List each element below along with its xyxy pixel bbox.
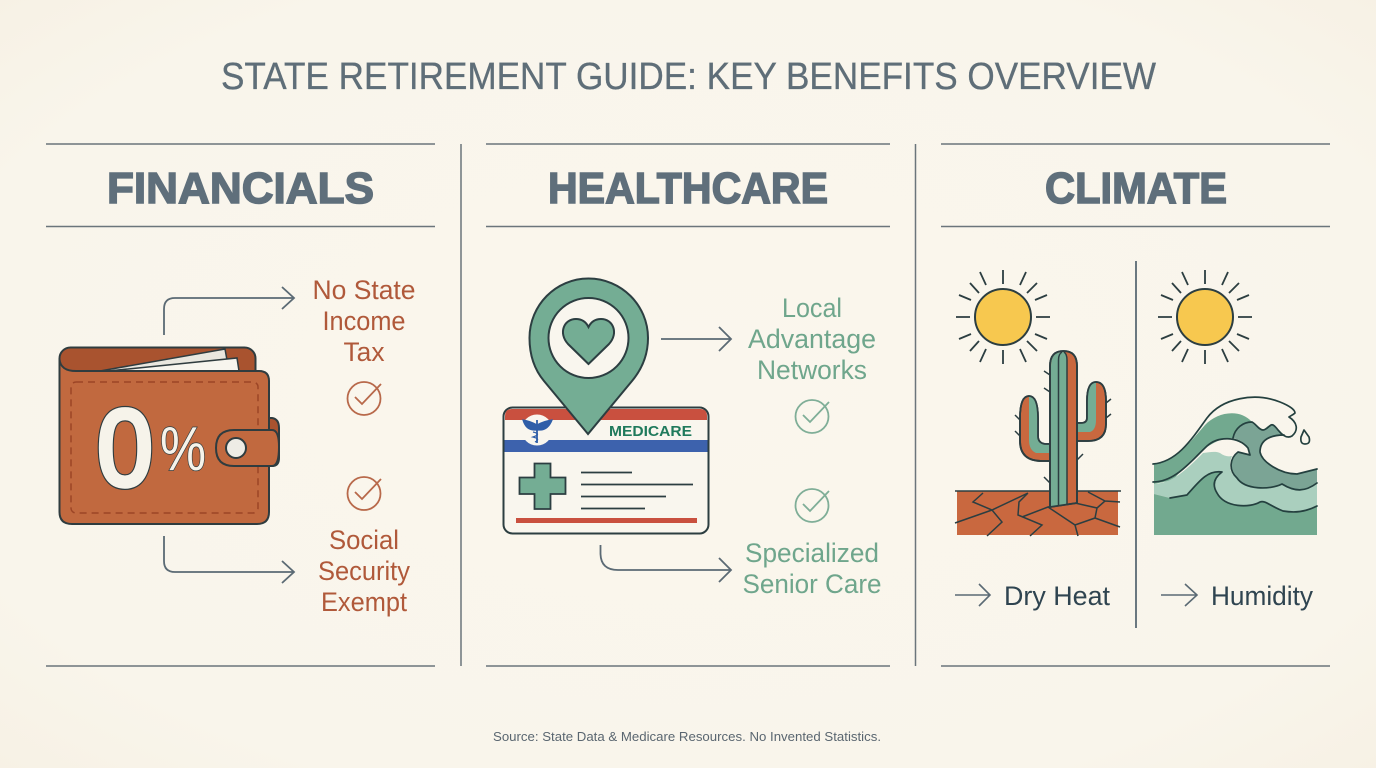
text: specialized senior care: Senior Care bbox=[742, 569, 882, 599]
label: 0%: 0 bbox=[98, 387, 152, 508]
source note: Source: State Data & Medicare Resources. No Invented Statistics. bbox=[493, 729, 881, 744]
text: dry heat: Dry Heat bbox=[1004, 581, 1110, 611]
icon: caduceus bbox=[523, 420, 552, 443]
text: humidity: Humidity bbox=[1211, 581, 1313, 611]
label: percent sign: % bbox=[160, 415, 206, 484]
panel: healthcare bbox=[504, 164, 882, 599]
icon: sun over sea bbox=[1158, 270, 1252, 364]
arrow: to dry heat bbox=[955, 584, 990, 606]
arrow: to no state income tax bbox=[164, 287, 294, 335]
icon: wave bbox=[1153, 397, 1317, 535]
icon: cracked desert ground bbox=[955, 491, 1121, 536]
icon: location pin with heart bbox=[530, 278, 648, 434]
icon: check bbox=[348, 382, 381, 415]
heading: financials: FINANCIALS bbox=[107, 164, 374, 213]
text: local advantage networks: Advantage bbox=[748, 324, 876, 354]
icon: wallet with 0% bbox=[60, 348, 279, 524]
icon: medicare card bbox=[504, 408, 708, 534]
icon: check bbox=[796, 489, 829, 522]
icon: cactus bbox=[1015, 351, 1111, 507]
title: STATE RETIREMENT GUIDE: KEY BENEFITS OVERVIEW bbox=[221, 56, 1156, 98]
arrow: to humidity bbox=[1161, 584, 1197, 606]
text: social security exempt: Exempt bbox=[321, 587, 407, 617]
icon: check bbox=[796, 400, 829, 433]
label: medicare: MEDICARE bbox=[609, 424, 692, 440]
icon: sun over desert bbox=[956, 270, 1050, 364]
arrow: to specialized senior care bbox=[600, 545, 731, 582]
panel: financials bbox=[60, 164, 416, 617]
text: local advantage networks bbox=[748, 293, 876, 385]
text: local advantage networks: Local bbox=[782, 293, 842, 323]
text: social security exempt: Security bbox=[318, 556, 410, 586]
heading: healthcare: HEALTHCARE bbox=[548, 164, 828, 213]
text: no state income tax: Income bbox=[322, 306, 406, 336]
text: social security exempt: Social bbox=[329, 525, 399, 555]
text: no state income tax: No State bbox=[312, 275, 416, 305]
text: social security exempt bbox=[318, 525, 410, 617]
label: zero fill: 0 bbox=[98, 387, 152, 508]
text: no state income tax bbox=[312, 275, 416, 367]
text: specialized senior care: Specialized bbox=[745, 538, 879, 568]
text: specialized senior care bbox=[742, 538, 882, 599]
heading: climate: CLIMATE bbox=[1045, 164, 1227, 213]
arrow: to local advantage networks bbox=[661, 327, 731, 351]
arrow: to social security exempt bbox=[164, 536, 294, 583]
icon: check bbox=[348, 477, 381, 510]
text: local advantage networks: Networks bbox=[757, 355, 867, 385]
text: no state income tax: Tax bbox=[344, 337, 385, 367]
panel: climate bbox=[955, 164, 1317, 628]
